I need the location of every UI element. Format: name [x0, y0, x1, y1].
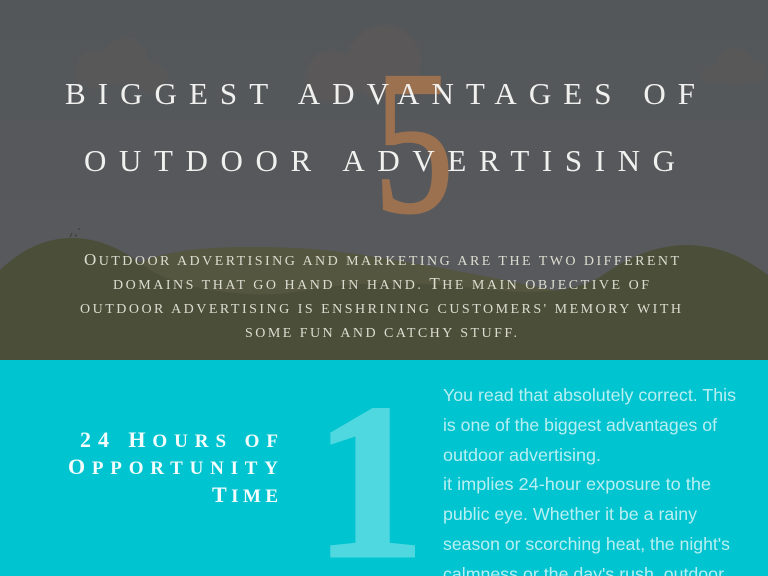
icon: centre cloud	[306, 25, 436, 102]
section heading: O PPORTUNITY	[68, 454, 278, 479]
section heading: TIME	[212, 482, 278, 507]
body text: outdoor advertising.	[443, 445, 601, 465]
body text: is one of the biggest advantages of	[443, 415, 717, 435]
section heading: 24 H OURS OF	[80, 427, 278, 452]
panel: header landscape	[0, 0, 768, 360]
intro text block: OUTDOOR ADVERTISING AND MARKETING ARE THE TWO DIFFERENT	[84, 250, 679, 269]
body text: season or scorching heat, the night's	[443, 534, 730, 554]
body text: public eye. Whether it be a rainy	[443, 504, 697, 524]
middle hill	[140, 247, 560, 330]
title line 2: OUTDOOR ADVERTISING	[84, 143, 675, 178]
large numeral 5: 5	[374, 29, 454, 256]
body text	[443, 385, 736, 576]
body text: You read that absolutely correct. This	[443, 385, 736, 405]
icon: right cloud	[702, 48, 766, 86]
section heading	[69, 432, 278, 502]
intro text block: SOME FUN AND CATCHY STUFF.	[245, 326, 517, 341]
body text: it implies 24-hour exposure to the	[443, 474, 711, 494]
intro text block: DOMAINS THAT GO HAND IN HAND. THE MAIN OBJECTIVE OF	[113, 274, 649, 293]
intro text block: OUTDOOR ADVERTISING IS ENSHRINING CUSTOMERS' MEMORY WITH	[80, 302, 681, 317]
icon: left cloud	[76, 38, 168, 94]
icon: tiny figure on hill	[70, 228, 79, 237]
intro text block	[80, 250, 681, 341]
title line 1: BIGGEST ADVANTAGES OF	[65, 76, 695, 111]
panel: advantage 1	[69, 388, 736, 576]
foreground hills	[0, 238, 768, 360]
